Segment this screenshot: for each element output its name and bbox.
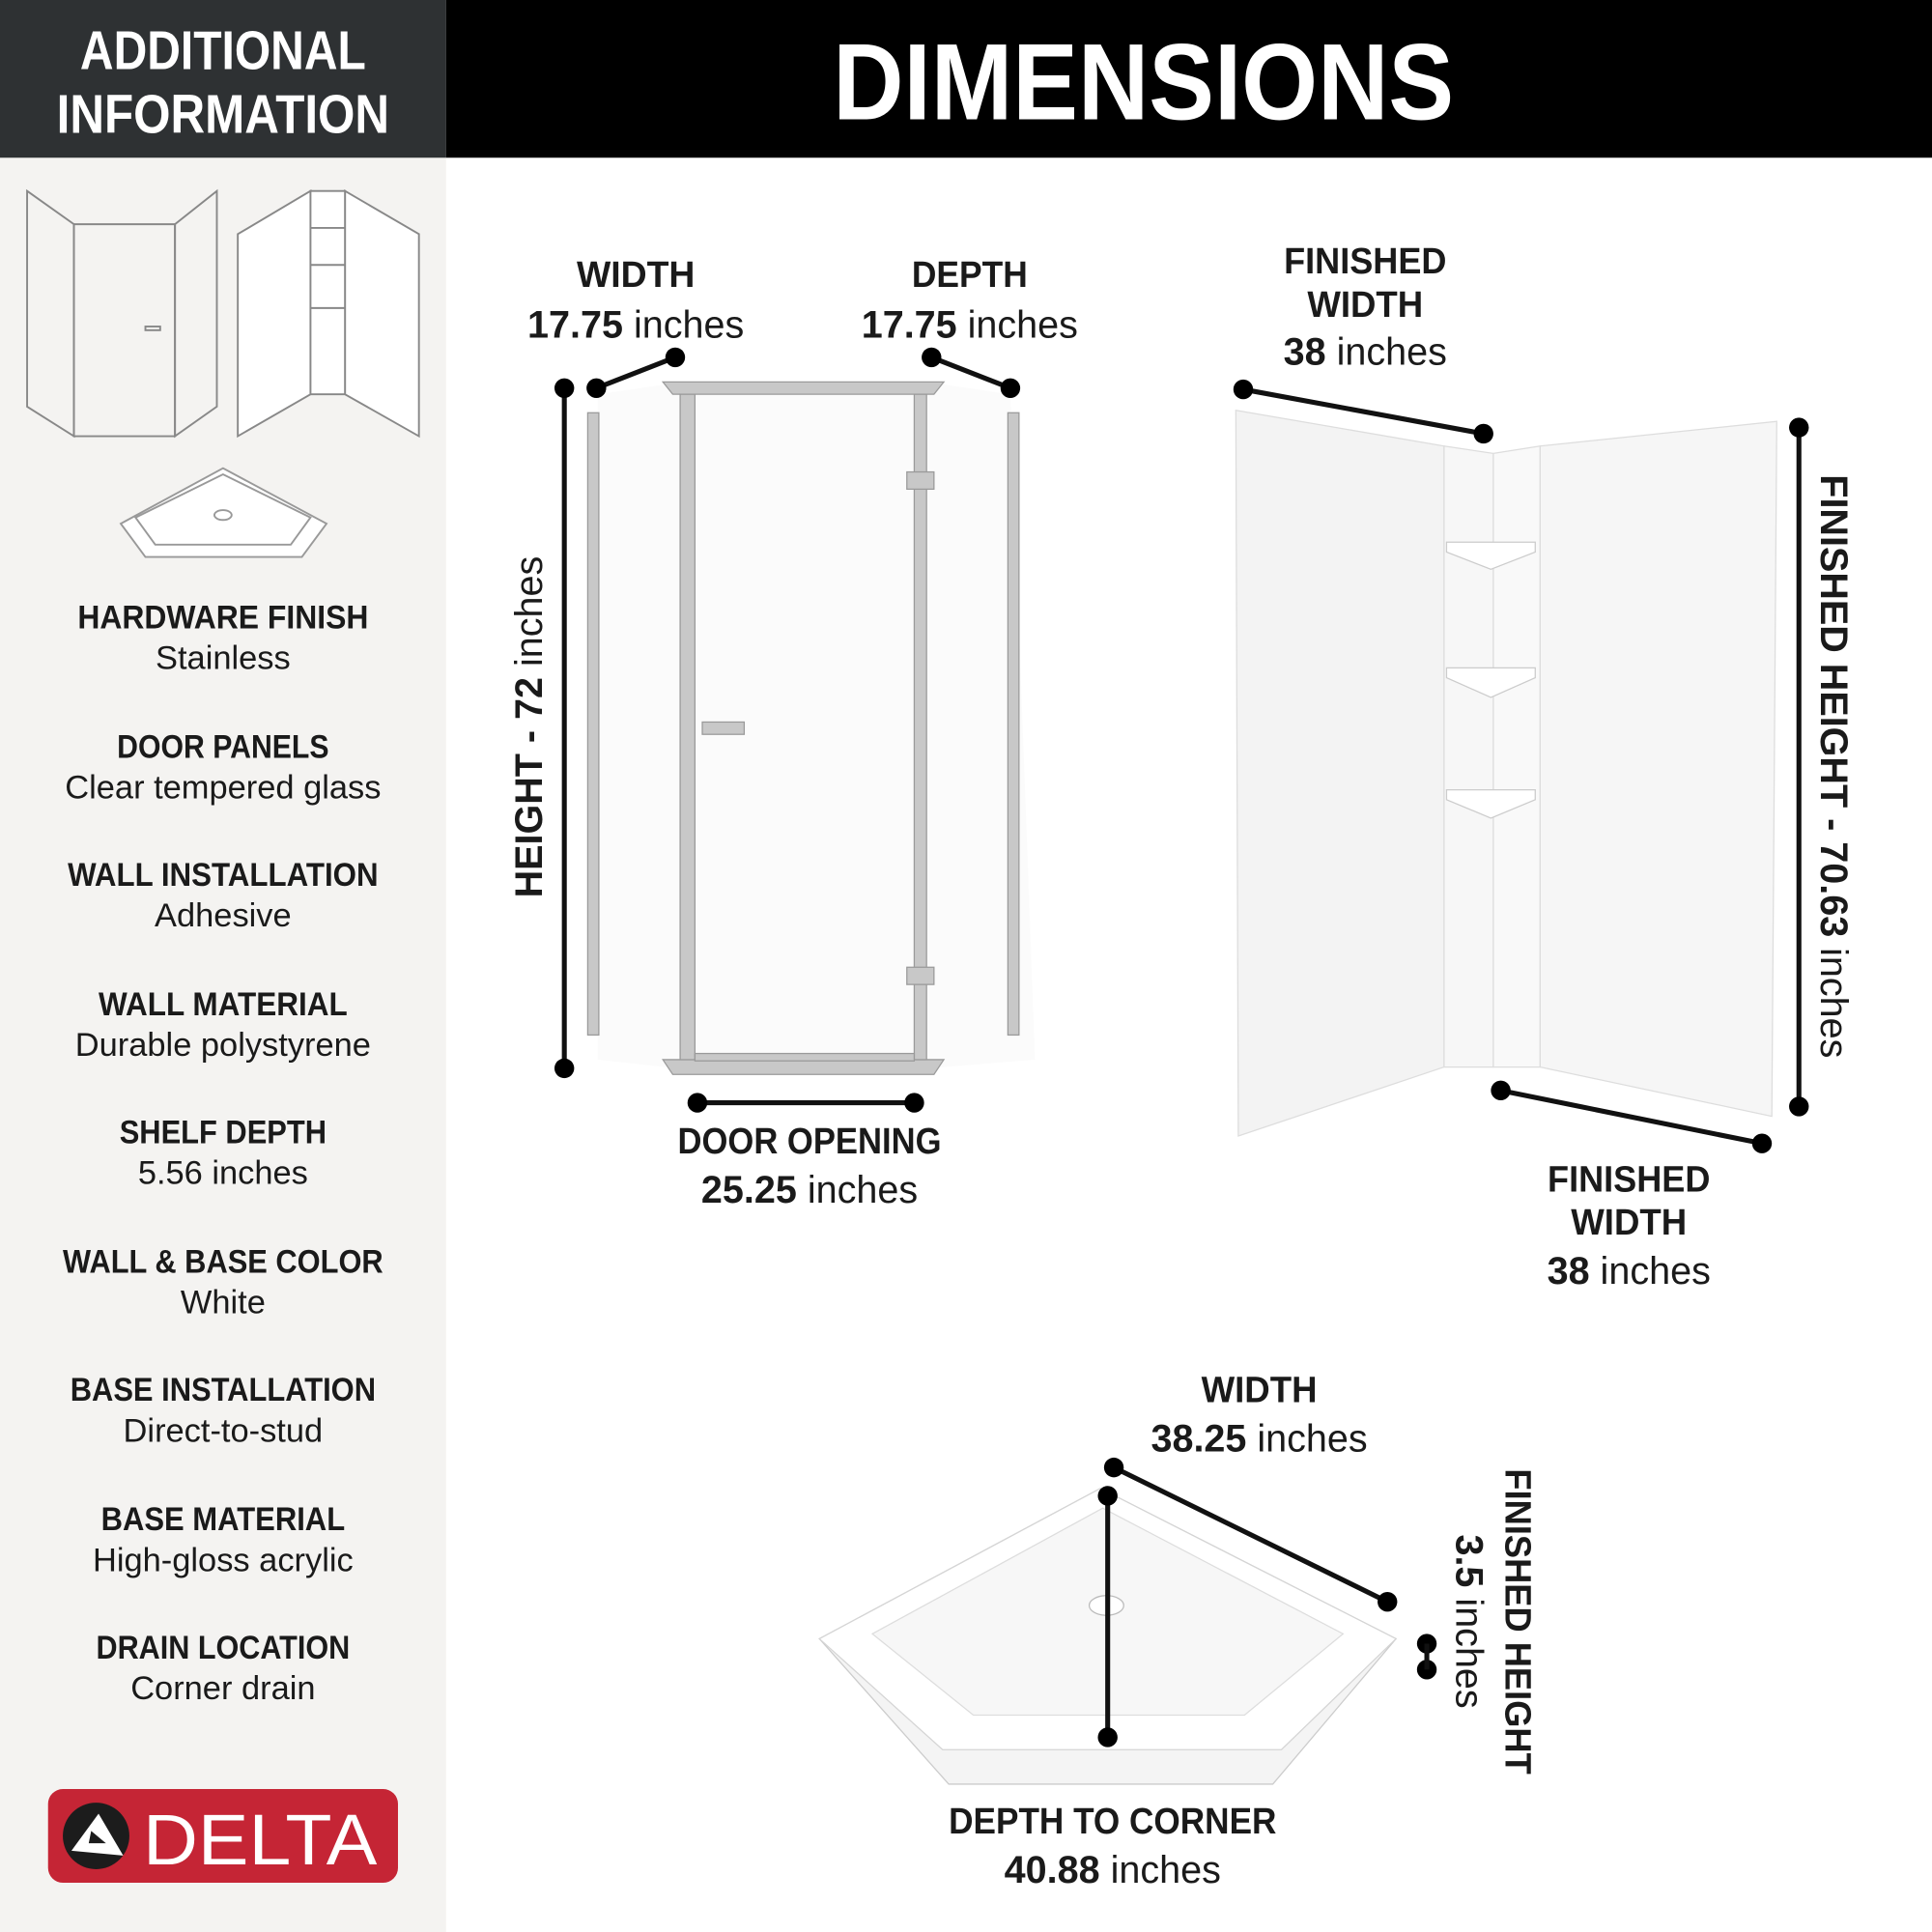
- dimension: base height: 3.5 inches: [1448, 1534, 1491, 1709]
- dimension: wall bottom width: WIDTH: [1571, 1202, 1687, 1243]
- spec list: SHELF DEPTH: [120, 1115, 327, 1151]
- dimension: wall height: [1789, 417, 1855, 1117]
- dimension: door depth: DEPTH: [912, 254, 1028, 296]
- spec list: WALL MATERIAL: [99, 986, 348, 1023]
- dimension: wall top width: WIDTH: [1307, 284, 1423, 326]
- dimension: wall top width: FINISHED: [1284, 241, 1446, 282]
- spec list: DOOR PANELS: [117, 728, 329, 765]
- dimension: door depth: 17.75 inches: [862, 303, 1078, 346]
- spec list: High-gloss acrylic: [93, 1542, 354, 1578]
- dimension: wall top width: 38 inches: [1284, 331, 1447, 374]
- spec list: [63, 600, 384, 1707]
- sidebar header: ADDITIONAL: [80, 19, 366, 80]
- dimension: wall bottom width: 38 inches: [1548, 1250, 1711, 1293]
- dimension: base height: FINISHED HEIGHT: [1497, 1468, 1539, 1775]
- dimension: base width: 38.25 inches: [1151, 1418, 1368, 1461]
- dimension: door opening: 25.25 inches: [701, 1169, 918, 1211]
- header: dimensions: [446, 0, 1932, 157]
- dimension: door width: 17.75 inches: [527, 303, 744, 346]
- dimension: door height: [508, 379, 574, 1078]
- spec list: WALL INSTALLATION: [68, 857, 379, 894]
- spec list: 5.56 inches: [138, 1155, 308, 1192]
- dimension: door height: HEIGHT - 72 inches: [508, 556, 551, 897]
- dimension: wall bottom width: [1491, 1081, 1772, 1293]
- spec list: Clear tempered glass: [65, 770, 381, 807]
- spec list: Corner drain: [130, 1670, 316, 1707]
- spec list: Stainless: [156, 640, 291, 677]
- spec list: Direct-to-stud: [124, 1412, 323, 1449]
- dimension: base height: [1417, 1468, 1539, 1775]
- dimension: base depth to corner: 40.88 inches: [1005, 1849, 1221, 1891]
- spec list: BASE MATERIAL: [101, 1501, 345, 1538]
- spec list: Durable polystyrene: [75, 1027, 371, 1064]
- dimension: wall top width: [1234, 241, 1493, 443]
- header: dimensions: DIMENSIONS: [833, 21, 1454, 143]
- dimension: door opening: DOOR OPENING: [678, 1121, 941, 1162]
- spec list: BASE INSTALLATION: [71, 1372, 376, 1408]
- dimension: door depth: [862, 254, 1078, 398]
- diagram: shower door: [587, 382, 1035, 1074]
- dimension: base depth to corner: DEPTH TO CORNER: [949, 1801, 1276, 1842]
- sidebar panel: [0, 0, 446, 1932]
- dimension: base width: WIDTH: [1202, 1370, 1318, 1411]
- spec list: White: [181, 1285, 266, 1321]
- spec list: WALL & BASE COLOR: [63, 1244, 384, 1281]
- thumbnail: shower door: [27, 191, 216, 437]
- logo: Delta: [48, 1789, 398, 1883]
- sidebar header: INFORMATION: [57, 84, 389, 145]
- diagram: shower base: [819, 1489, 1396, 1784]
- dimension: door width: [527, 254, 744, 398]
- dimension: door width: WIDTH: [577, 254, 695, 296]
- diagram: walls: [1236, 411, 1776, 1136]
- dimension: base depth to corner: [949, 1486, 1276, 1891]
- spec list: Adhesive: [155, 897, 292, 934]
- logo: Delta: DELTA: [143, 1800, 378, 1880]
- spec list: DRAIN LOCATION: [96, 1630, 350, 1666]
- thumbnail: walls: [238, 191, 419, 437]
- dimension: base width: [1104, 1370, 1397, 1611]
- dimension: door opening: [678, 1093, 941, 1211]
- sidebar header: [0, 0, 446, 157]
- thumbnail: base: [121, 469, 327, 557]
- dimension: wall bottom width: FINISHED: [1548, 1158, 1710, 1200]
- dimension: wall height: FINISHED HEIGHT - 70.63 inches: [1812, 474, 1855, 1058]
- spec list: HARDWARE FINISH: [77, 600, 368, 637]
